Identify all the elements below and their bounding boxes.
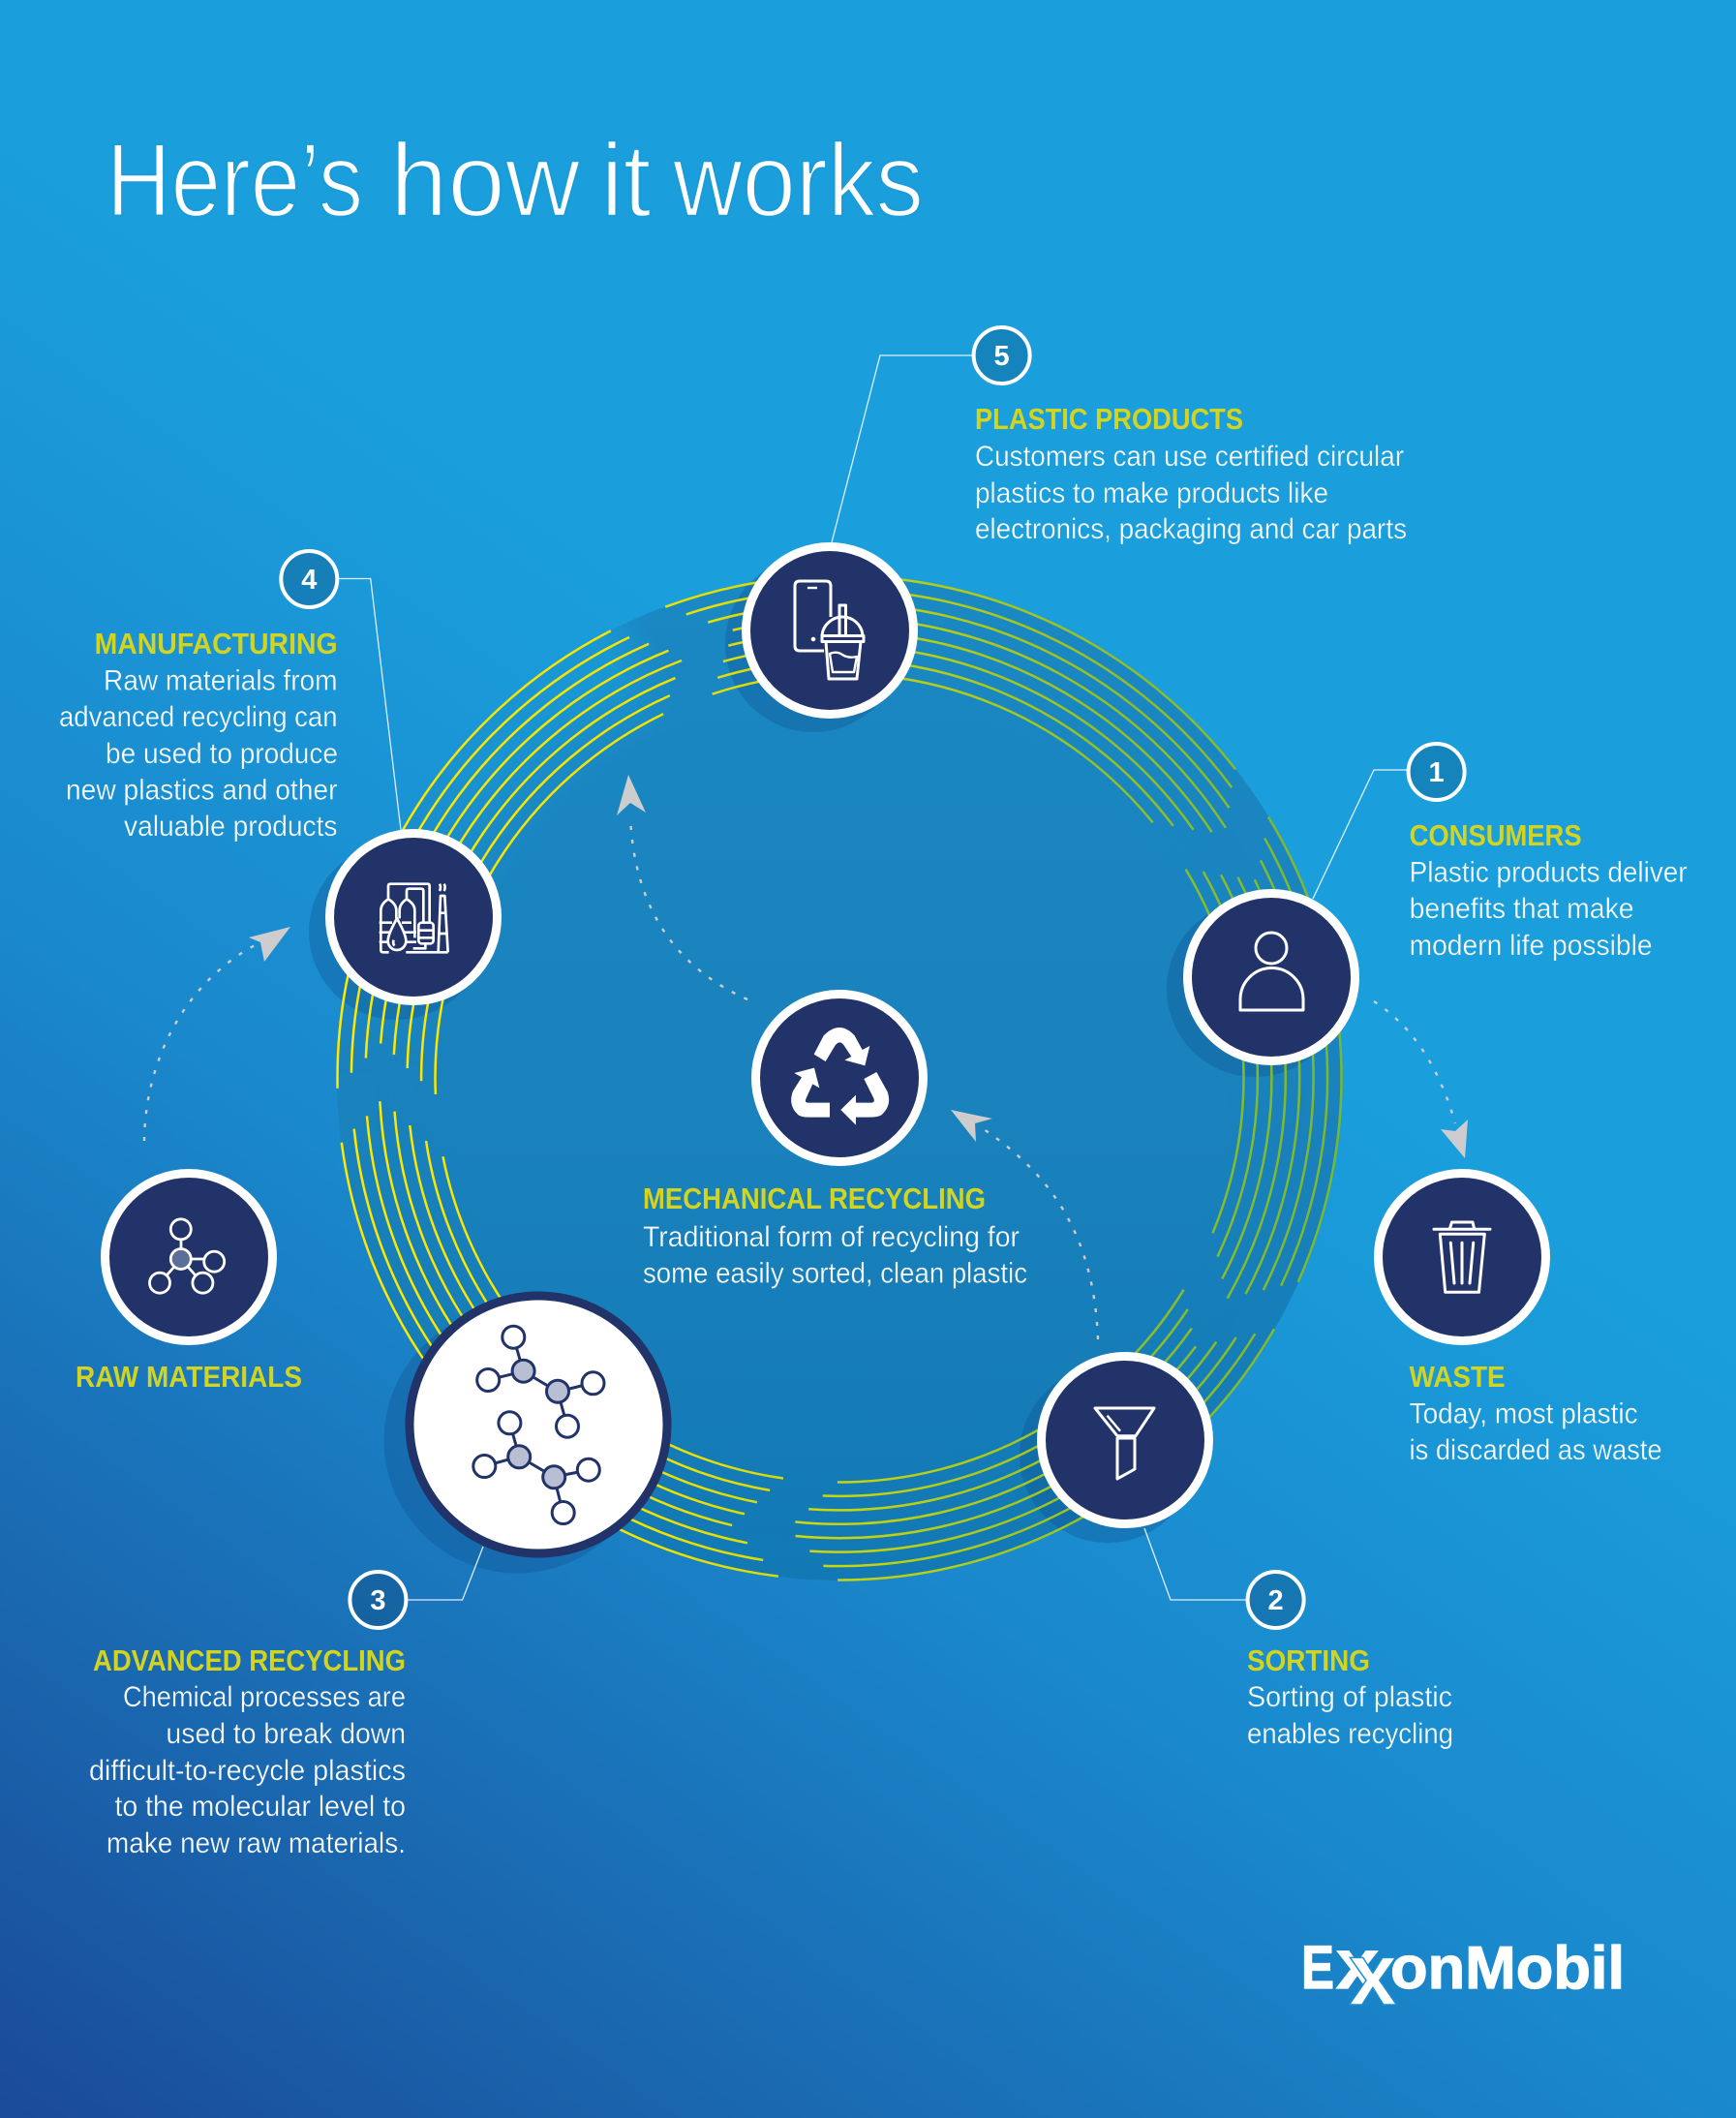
logo: ExxonMobil: x — [1349, 1925, 1397, 2024]
text: consumers: CONSUMERS — [1410, 818, 1582, 852]
leader line 5 — [832, 355, 972, 542]
badge 3 — [350, 1572, 406, 1628]
text: sorting: Sorting of plastic — [1247, 1681, 1452, 1713]
text: advanced recycling: to the molecular level to — [114, 1791, 406, 1823]
text: manufacturing: MANUFACTURING — [95, 627, 338, 660]
text: manufacturing — [59, 627, 338, 843]
background ring band — [337, 575, 1342, 1581]
title: it — [600, 121, 651, 238]
logo: ExxonMobil: onMobil — [1390, 1935, 1625, 2002]
text: mechanical recycling: some easily sorted, clean plastic — [643, 1258, 1027, 1290]
icon: refinery — [380, 884, 448, 952]
leader line 1 — [1313, 770, 1407, 899]
recycling ring lines — [337, 575, 1342, 1581]
icon: funnel — [1095, 1408, 1154, 1479]
text: manufacturing: be used to produce — [106, 738, 338, 770]
logo: ExxonMobil — [1301, 1925, 1625, 2024]
logo: ExxonMobil: x — [1336, 1926, 1379, 2004]
badge 4: 4 — [301, 565, 317, 596]
text: plastic products: PLASTIC PRODUCTS — [975, 402, 1243, 436]
text: advanced recycling: ADVANCED RECYCLING — [93, 1643, 406, 1677]
icon: trash can — [1434, 1222, 1490, 1292]
node 1: consumers — [1187, 893, 1355, 1061]
text: manufacturing: new plastics and other — [66, 774, 337, 806]
node 3: advanced recycling — [410, 1296, 667, 1553]
ring segment: bottom right — [337, 575, 1342, 1581]
arrow: raw materials to manufacturing — [144, 927, 290, 1141]
text: waste — [1410, 1360, 1662, 1466]
text: mechanical recycling — [643, 1182, 1027, 1290]
text: sorting — [1247, 1643, 1453, 1750]
icon: molecule — [149, 1219, 225, 1293]
title: how — [390, 121, 581, 238]
text: plastic products: plastics to make products like — [975, 477, 1328, 509]
badge 1 — [1409, 744, 1465, 800]
icon: phone and cup — [795, 581, 864, 679]
text: mechanical recycling: MECHANICAL RECYCLING — [643, 1182, 986, 1215]
leader line 3 — [407, 1547, 483, 1600]
node 2: sorting — [1042, 1356, 1208, 1524]
badge 1: 1 — [1429, 757, 1445, 788]
text: consumers — [1410, 818, 1688, 962]
node 5: plastic products — [746, 546, 914, 715]
arrow: consumers to waste — [1374, 1001, 1468, 1158]
node: waste — [1379, 1174, 1545, 1340]
text: consumers: Plastic products deliver — [1410, 856, 1688, 889]
badge 5: 5 — [994, 341, 1010, 372]
text: manufacturing: Raw materials from — [104, 664, 337, 697]
ring segment: right — [337, 575, 1342, 1581]
logo: ExxonMobil: E — [1301, 1934, 1334, 2002]
text: plastic products: Customers can use certified circular — [975, 441, 1404, 473]
node: mechanical recycling — [755, 994, 924, 1162]
icon: molecules — [473, 1326, 604, 1524]
node 4: manufacturing — [329, 833, 498, 1001]
text: waste: WASTE — [1410, 1360, 1506, 1394]
circle shadows — [309, 556, 1343, 1573]
text: advanced recycling: make new raw materials. — [107, 1827, 406, 1859]
text: manufacturing: valuable products — [124, 811, 337, 843]
ring segment: top left — [337, 575, 1342, 1581]
text: consumers: benefits that make — [1410, 893, 1634, 925]
ring segment: bottom left — [337, 575, 1342, 1581]
badge 2: 2 — [1268, 1585, 1284, 1616]
text: waste: Today, most plastic — [1410, 1398, 1638, 1430]
node: raw materials — [105, 1174, 273, 1340]
badge 4 — [281, 551, 337, 607]
title: Here’s — [107, 121, 363, 238]
badge 3: 3 — [370, 1585, 385, 1616]
text: plastic products — [975, 402, 1407, 545]
background inner disc — [471, 701, 802, 1059]
arrow: sorting to mechanical recycling — [951, 1110, 1098, 1339]
title: works — [672, 121, 924, 238]
title — [107, 121, 924, 238]
text: sorting: enables recycling — [1247, 1718, 1453, 1750]
text: raw materials: RAW MATERIALS — [76, 1360, 302, 1394]
badge 2 — [1248, 1572, 1304, 1628]
badge 5 — [974, 327, 1030, 384]
text: plastic products: electronics, packaging and car parts — [975, 513, 1407, 545]
text: mechanical recycling: Traditional form of recycling for — [643, 1221, 1020, 1253]
text: advanced recycling: difficult-to-recycle plastics — [89, 1755, 406, 1787]
leader line 2 — [1144, 1528, 1246, 1600]
text: consumers: modern life possible — [1410, 930, 1653, 962]
text: manufacturing: advanced recycling can — [59, 701, 337, 733]
text: advanced recycling — [89, 1643, 406, 1859]
arrow: mechanical recycling to products — [617, 775, 747, 999]
ring segment: top right — [337, 575, 1342, 1581]
text: advanced recycling: used to break down — [167, 1718, 406, 1750]
icon: person — [1240, 933, 1303, 1010]
icon: recycling arrows — [791, 1028, 889, 1125]
text: waste: is discarded as waste — [1410, 1434, 1662, 1466]
text: sorting: SORTING — [1247, 1643, 1370, 1677]
leader line 4 — [339, 579, 401, 830]
text: advanced recycling: Chemical processes are — [123, 1681, 406, 1713]
